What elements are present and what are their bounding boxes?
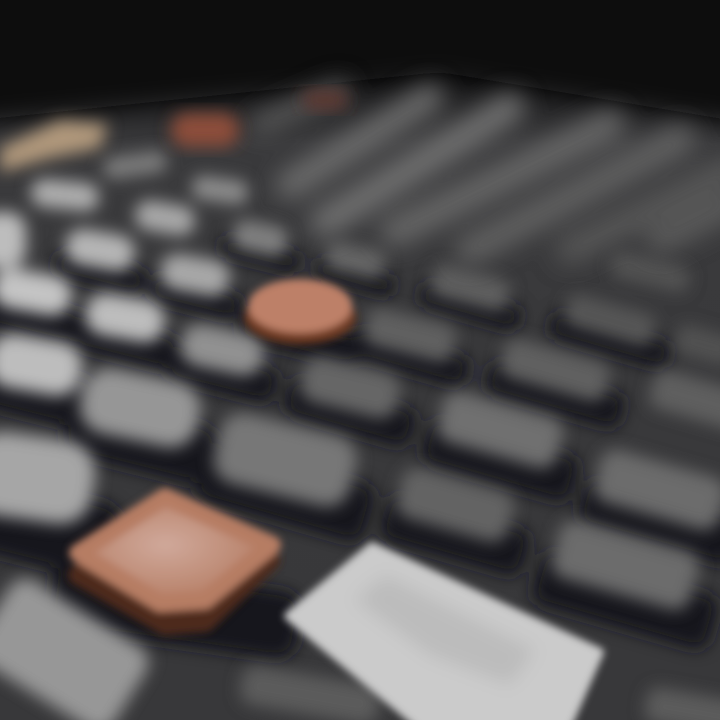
copper key: front left xyxy=(78,497,272,625)
grey key: bottom left xyxy=(0,572,155,720)
copper key: far centre xyxy=(303,90,347,110)
copper key: far xyxy=(171,113,239,147)
key shadows xyxy=(0,234,720,661)
white key: front xyxy=(288,546,600,720)
tan key: far left xyxy=(0,120,108,172)
black upper wedge xyxy=(0,0,720,125)
copper key: centre xyxy=(244,279,356,344)
diagonal long keys at top right xyxy=(260,90,720,250)
grey key tops xyxy=(0,150,720,720)
